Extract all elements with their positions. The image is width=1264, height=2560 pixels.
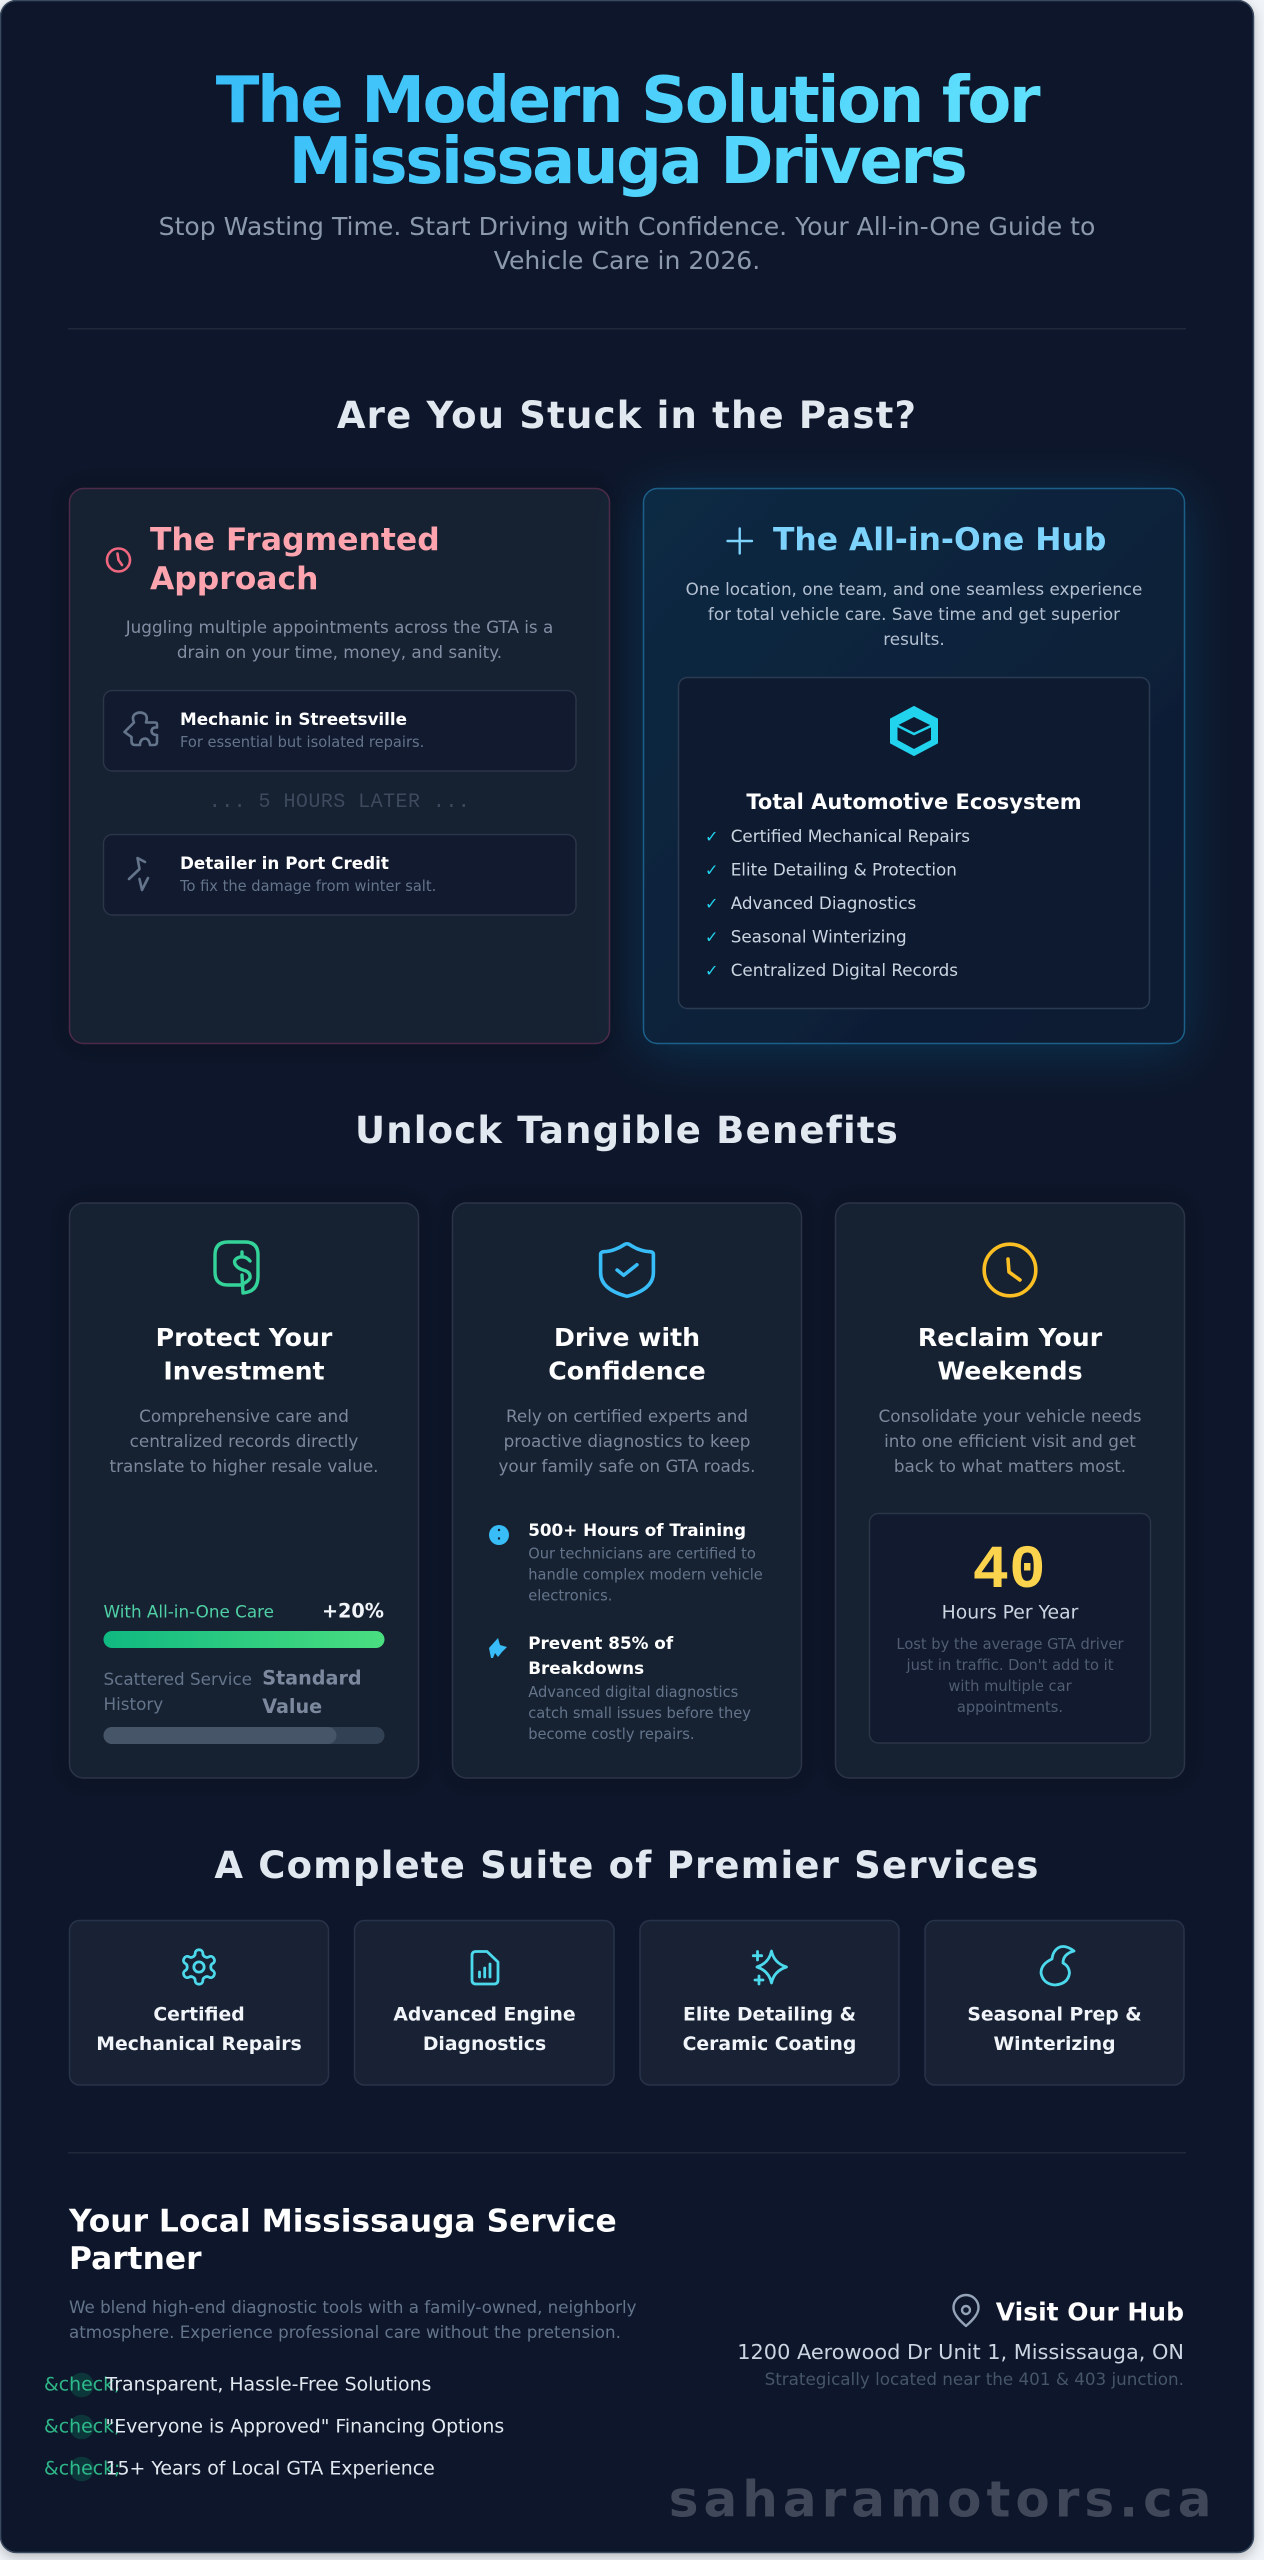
icon: dollar badge [215,1242,258,1293]
service name: Mechanical Repairs [96,2034,302,2055]
feature description: catch small issues before they [528,1705,751,1722]
panel title: The Fragmented [150,522,440,558]
service name: Certified [153,2005,245,2026]
title: The Modern Solution for [216,64,1041,138]
heading: a complete suite of premier services: A Complete Suite of Premier Services [214,1844,1040,1887]
checklist: ✓ [705,860,718,880]
icon: flame [1041,1946,1074,1985]
icon: cube [890,706,938,756]
feature description: Our technicians are certified to [528,1546,756,1562]
card description: into one efficient visit and get [884,1431,1136,1451]
feature title: Prevent 85% of [528,1633,674,1653]
watermark: saharamotors.ca [669,2471,1216,2529]
footer: visit our hub [737,2295,1184,2389]
card title: Weekends [937,1356,1083,1386]
item description: To fix the damage from winter salt. [179,878,436,895]
item: mechanic [104,690,576,771]
bar value: standard value: Value [262,1695,322,1718]
stat number: 40 [972,1537,1046,1606]
list item: financing: &check; [44,2416,120,2438]
stat label: Hours Per Year [942,1602,1079,1624]
feature: prevent breakdowns [489,1633,751,1743]
bar chart: resale value [104,1600,384,1744]
icon: wash [129,858,148,890]
service name: Seasonal Prep & [967,2005,1142,2026]
feature description: handle complex modern vehicle [528,1566,763,1584]
address: 1200 Aerowood Dr Unit 1, Mississauga, ON [737,2340,1184,2364]
feature: training [489,1520,763,1604]
bar label: all-in-one care: With All-in-One Care [104,1602,274,1622]
list item: experience: &check; [44,2458,120,2480]
card description: Comprehensive care and [139,1406,349,1426]
panel: protect your investment [70,1203,418,1778]
icon: puzzle [124,712,157,745]
footer heading: Partner [69,2241,202,2277]
item description: For essential but isolated repairs. [180,734,424,751]
checklist: ✓ [705,928,718,946]
feature description: electronics. [528,1588,612,1604]
bar label: scattered service history: Scattered Service [104,1669,252,1689]
panel: the fragmented approach [70,488,610,1044]
icon: file chart [472,1952,498,1984]
card title: Confidence [548,1356,706,1386]
icon: shield check [601,1244,653,1296]
panel description: Juggling multiple appointments across the GTA is a [125,617,553,637]
bar value: plus twenty percent: +20% [322,1600,384,1622]
panel description: for total vehicle care. Save time and get superior [708,604,1120,624]
item title: Mechanic in Streetsville [180,709,407,729]
stat box: hours per year [870,1514,1150,1743]
feature title: Breakdowns [528,1658,644,1678]
service: seasonal prep [925,1920,1184,2085]
footer: local partner [44,2204,637,2481]
card description: your family safe on GTA roads. [498,1456,756,1476]
subtitle: Vehicle Care in 2026. [494,246,760,275]
feature description: Advanced digital diagnostics [528,1684,738,1701]
card title: Protect Your [156,1323,333,1352]
checklist: ✓ [705,827,718,846]
card description: Rely on certified experts and [506,1406,748,1426]
card description: proactive diagnostics to keep [504,1431,750,1451]
checklist: Advanced Diagnostics [731,893,916,913]
panel description: One location, one team, and one seamless experience [686,579,1142,599]
service name: Ceramic Coating [683,2034,856,2055]
card description: centralized records directly [130,1431,358,1451]
heading: unlock tangible benefits: Unlock Tangible Benefits [355,1109,899,1152]
stat note: Lost by the average GTA driver [896,1636,1125,1653]
service name: Winterizing [993,2034,1116,2055]
icon: plus [728,528,752,554]
checklist: Seasonal Winterizing [731,926,907,946]
header [159,64,1095,275]
item title: Detailer in Port Credit [180,853,389,873]
card title: Reclaim Your [918,1323,1103,1352]
card title: Drive with [554,1323,700,1352]
bar value: standard value: Standard [262,1666,362,1690]
service: mechanical repairs [70,1920,328,2085]
service name: Elite Detailing & [683,2005,856,2026]
checklist: ✓ [705,961,718,980]
card title: Investment [163,1356,325,1386]
list item: transparent: Transparent, Hassle-Free Solutions [104,2374,431,2396]
bar label: scattered service history: History [104,1694,163,1714]
card: total automotive ecosystem [678,678,1150,1008]
footer description: We blend high-end diagnostic tools with a family-owned, neighborly [69,2297,637,2317]
feature description: become costly repairs. [528,1726,695,1743]
panel title: The All-in-One Hub [773,522,1106,558]
icon: sparkles [753,1951,786,1984]
stat note: appointments. [957,1699,1063,1716]
subtitle: Stop Wasting Time. Start Driving with Confidence. Your All-in-One Guide to [159,212,1095,241]
footer description: atmosphere. Experience professional care without the pretension. [69,2322,621,2342]
location note: Strategically located near the 401 & 403 junction. [765,2369,1184,2389]
panel: drive with confidence [452,1203,802,1778]
service name: Advanced Engine [393,2005,576,2026]
icon: map pin [954,2295,978,2326]
bar: scattered service [104,1727,384,1744]
icon: badge [489,1525,509,1545]
checklist: ✓ [705,894,718,913]
feature title: 500+ Hours of Training [528,1520,746,1540]
panel description: drain on your time, money, and sanity. [177,642,502,662]
card description: back to what matters most. [894,1456,1126,1476]
list item: experience: 15+ Years of Local GTA Experience [106,2458,435,2480]
stat note: just in traffic. Don't add to it [906,1657,1114,1674]
title: Mississauga Drivers [289,125,966,199]
heading: are you stuck in the past: Are You Stuck in the Past? [337,394,917,437]
checklist: Elite Detailing & Protection [731,860,957,880]
panel: the all-in-one hub [644,488,1184,1044]
bar: all-in-one care [104,1631,384,1648]
footer heading: Your Local Mississauga Service [68,2204,617,2240]
icon: clock [984,1244,1036,1296]
icon: gear [183,1950,215,1984]
icon: clock [107,548,130,572]
stat note: with multiple car [948,1678,1073,1695]
checklist: Centralized Digital Records [731,960,958,980]
panel: services [70,1920,1184,2085]
separator: five hours later: ... 5 HOURS LATER ... [209,791,470,814]
list item: financing: "Everyone is Approved" Financing Options [106,2416,504,2438]
card description: translate to higher resale value. [109,1456,379,1476]
panel description: results. [883,629,945,649]
service name: Diagnostics [423,2034,546,2055]
visit heading: Visit Our Hub [996,2298,1184,2327]
checklist [705,826,970,980]
card description: Consolidate your vehicle needs [879,1406,1141,1426]
icon: star [489,1638,507,1658]
card title: Total Automotive Ecosystem [746,790,1082,814]
service: engine diagnostics [354,1920,614,2085]
panel title: Approach [150,561,318,597]
panel: reclaim your weekends [836,1203,1184,1778]
list item: transparent: &check; [44,2374,120,2396]
checklist: Certified Mechanical Repairs [731,826,970,846]
service: detailing [640,1920,899,2085]
item: detailer [104,834,576,915]
